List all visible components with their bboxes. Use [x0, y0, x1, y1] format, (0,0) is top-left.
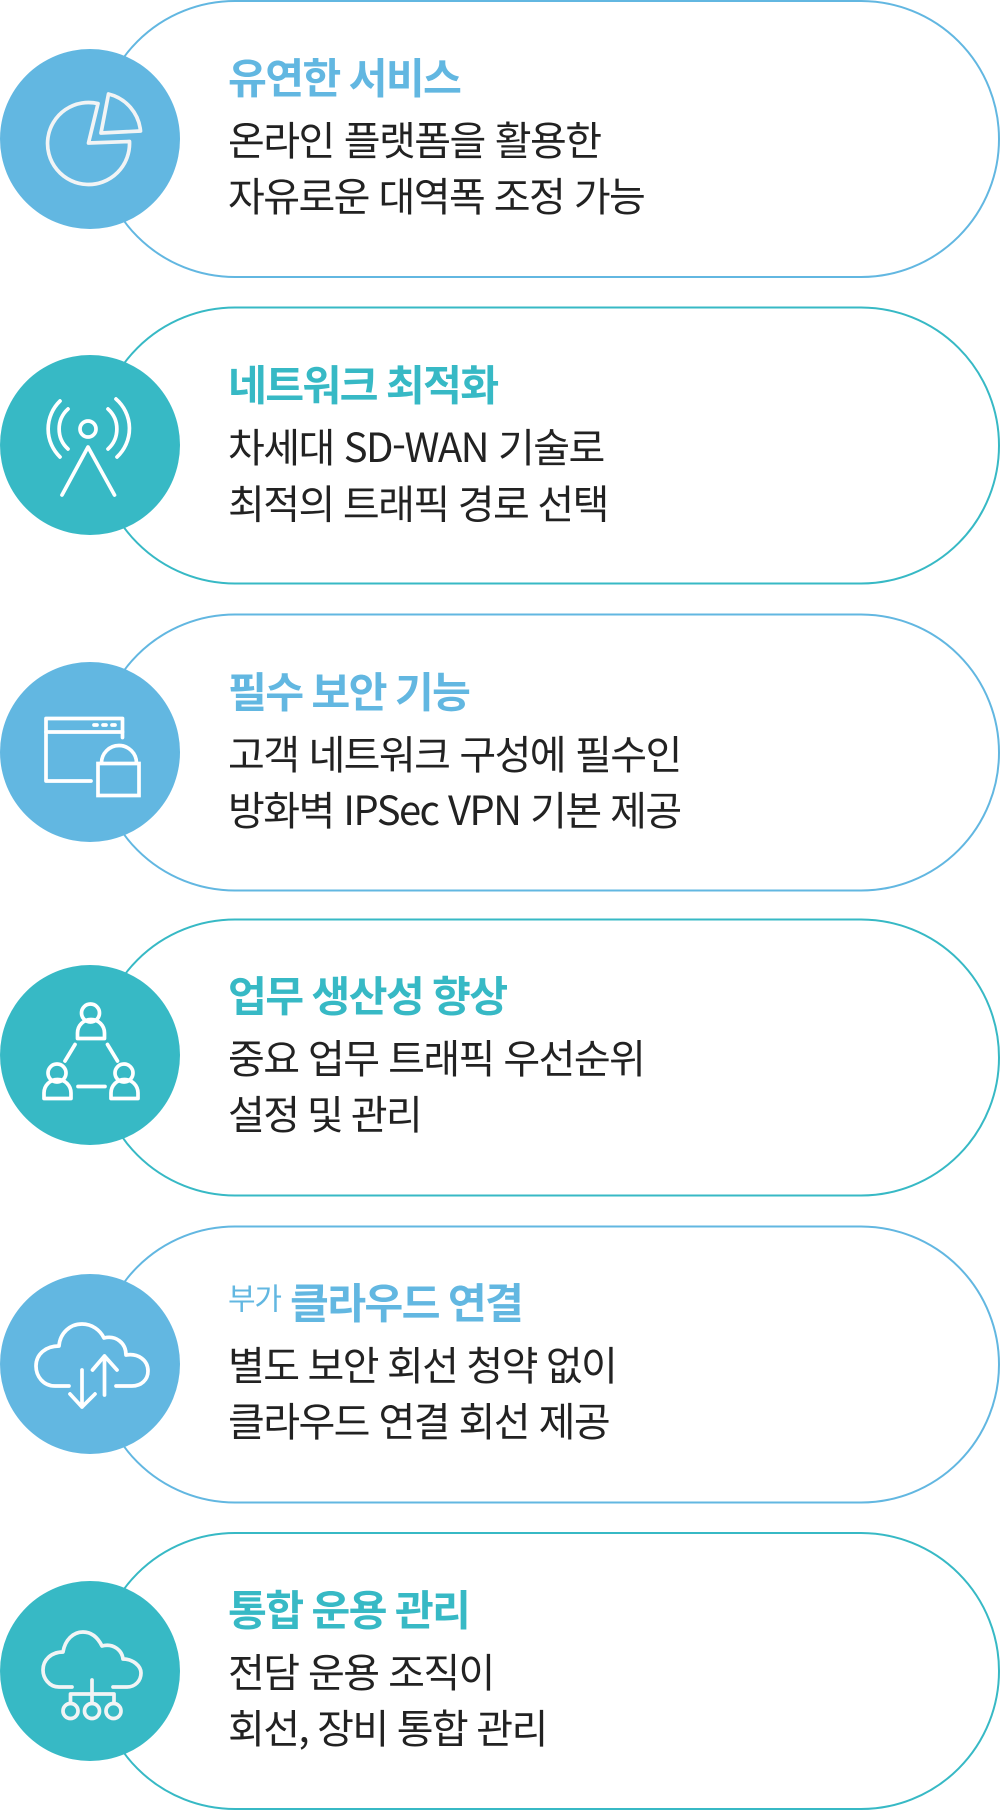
icon: connected people	[44, 1004, 138, 1098]
icon circle	[0, 965, 180, 1145]
panel: network optimization	[0, 308, 999, 584]
heading: 필수 보안 기능	[228, 660, 470, 720]
pill outline	[97, 614, 999, 890]
text block: 자유로운 대역폭 조정 가능	[228, 165, 644, 223]
text block: 회선, 장비 통합 관리	[228, 1697, 547, 1755]
heading: 유연한 서비스	[228, 46, 461, 106]
text block	[228, 416, 608, 530]
icon circle	[0, 1274, 180, 1454]
heading: 클라우드 연결	[290, 1270, 522, 1332]
icon circle	[0, 355, 180, 535]
pill outline	[97, 920, 999, 1196]
text block	[228, 1027, 644, 1141]
text block	[228, 1334, 616, 1448]
panel: productivity	[0, 920, 999, 1196]
text block: 클라우드 연결 회선 제공	[228, 1390, 609, 1448]
text block	[228, 109, 644, 223]
panel: integrated operations	[0, 1533, 999, 1809]
pill outline	[97, 1, 999, 277]
icon: cloud network	[43, 1632, 141, 1718]
text block: 온라인 플랫폼을 활용한	[228, 109, 601, 167]
icon: pie chart	[48, 94, 140, 184]
heading: 부가	[228, 1274, 281, 1318]
text block	[228, 1641, 547, 1755]
icon: browser window with lock	[46, 718, 139, 796]
panel: flexible service	[0, 1, 999, 277]
text block	[228, 723, 681, 837]
icon: antenna	[48, 399, 129, 495]
text block: 별도 보안 회선 청약 없이	[228, 1334, 616, 1392]
icon circle	[0, 1581, 180, 1761]
heading: 네트워크 최적화	[228, 352, 498, 414]
text block: 차세대 SD-WAN 기술로	[228, 416, 604, 474]
text block: 중요 업무 트래픽 우선순위	[228, 1027, 644, 1085]
pill outline	[97, 308, 999, 584]
panel: cloud connection	[0, 1226, 999, 1502]
text block: 전담 운용 조직이	[228, 1641, 494, 1699]
heading: 업무 생산성 향상	[228, 964, 507, 1024]
text block: 최적의 트래픽 경로 선택	[228, 472, 608, 530]
text block: 고객 네트워크 구성에 필수인	[228, 723, 681, 781]
heading: 통합 운용 관리	[228, 1578, 469, 1638]
icon: cloud up and down	[36, 1324, 148, 1407]
panel: essential security	[0, 614, 999, 890]
icon circle	[0, 49, 180, 229]
text block: 설정 및 관리	[228, 1083, 421, 1141]
text block: 방화벽 IPSec VPN 기본 제공	[228, 779, 681, 837]
icon circle	[0, 662, 180, 842]
pill outline	[97, 1226, 999, 1502]
pill outline	[97, 1533, 999, 1809]
